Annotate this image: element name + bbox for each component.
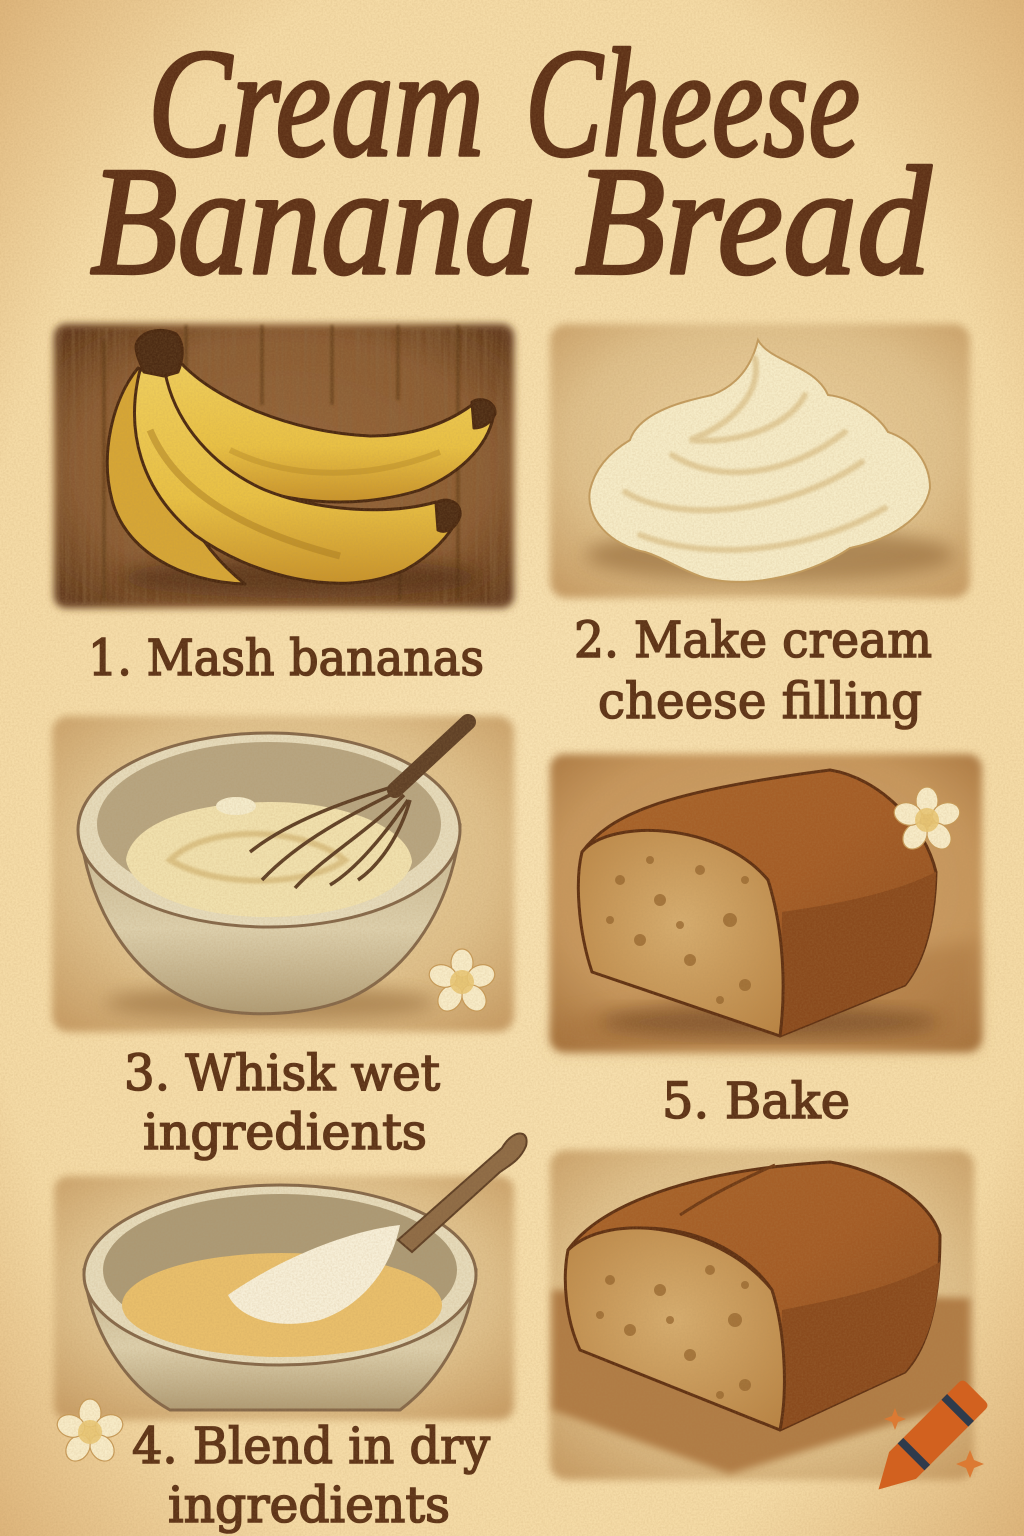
title: Cream (148, 17, 484, 189)
panel 1: mash bananas (54, 324, 514, 608)
wooden background (54, 324, 514, 608)
icon: bowl (78, 733, 460, 1014)
icon: whisk (250, 722, 468, 888)
step 1 label: 1. Mash bananas (88, 629, 484, 687)
icon: spoon (398, 1133, 527, 1252)
wooden board (552, 1290, 970, 1474)
icon: finished loaf (565, 1162, 940, 1430)
title: Banana (90, 135, 536, 307)
icon: flower (54, 1399, 126, 1466)
panel 3: whisk wet ingredients (52, 716, 514, 1032)
title: Cheese (525, 17, 860, 189)
step 2 label (574, 611, 932, 730)
title (90, 17, 931, 307)
step 4 label (132, 1417, 491, 1534)
icon: crayon (865, 1378, 990, 1503)
icon: bananas (107, 330, 495, 584)
tan background (550, 324, 970, 598)
tan background (52, 716, 514, 1032)
title: Bread (575, 135, 931, 307)
panel 4: blend dry ingredients (54, 1133, 527, 1466)
step 5 label: 5. Bake (662, 1072, 850, 1130)
step 4 label: ingredients (168, 1476, 450, 1534)
icon: bowl (84, 1185, 476, 1410)
brown background (550, 754, 982, 1052)
panel 2: cream cheese (550, 324, 970, 598)
step 2 label: cheese filling (598, 672, 922, 730)
step 3 label: 3. Whisk wet (124, 1044, 440, 1102)
step 2 label: 2. Make cream (574, 611, 932, 669)
icon: cream swirl (589, 340, 930, 582)
panel 6: finished loaf (550, 1150, 974, 1480)
tan background (54, 1176, 514, 1420)
icon: flower (426, 949, 498, 1016)
icon: flower (891, 787, 963, 854)
icon: sparkles (884, 1408, 984, 1478)
step 4 label: 4. Blend in dry (132, 1417, 491, 1475)
icon: baked loaf (578, 770, 936, 1036)
tan background (550, 1150, 974, 1480)
step 3 label: ingredients (143, 1103, 427, 1161)
panel 5: bake (550, 754, 982, 1052)
step 3 label (124, 1044, 440, 1161)
